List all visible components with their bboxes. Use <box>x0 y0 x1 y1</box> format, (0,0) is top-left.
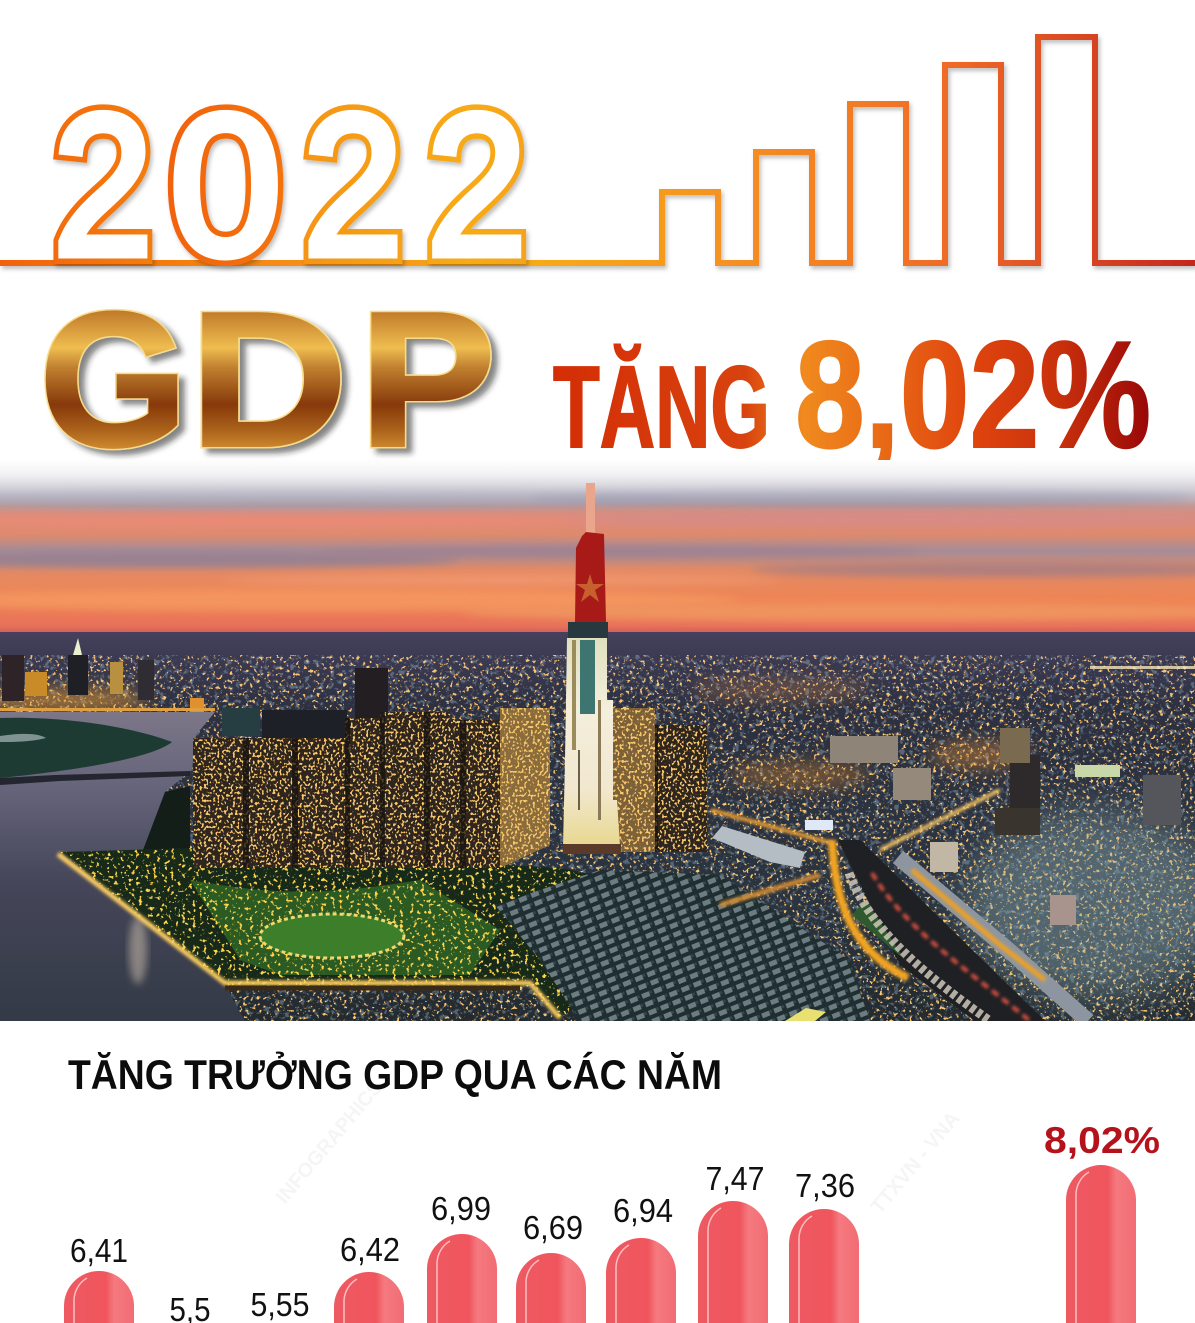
bar 6,69: 6,69 <box>523 1209 583 1246</box>
bar 7,47 <box>698 1160 768 1323</box>
green peninsula and bridge <box>0 718 190 785</box>
heading: 2022 outlined year: 2 <box>53 74 152 297</box>
heading: 2022 outlined year: 0 <box>170 74 281 297</box>
bar 6,99: 6,99 <box>431 1190 491 1227</box>
bar 6,99 <box>427 1190 497 1323</box>
photo: Ho Chi Minh City skyline at dusk <box>0 458 1195 1023</box>
bar 6,94 <box>606 1192 676 1323</box>
heading: GDP gold lettering <box>40 274 495 486</box>
heading: GDP gold lettering: G <box>40 274 187 486</box>
section title: TĂNG TRƯỞNG GDP QUA CÁC NĂM <box>68 1050 722 1098</box>
bar 6,41 <box>64 1232 134 1323</box>
buildings on the right side <box>712 728 1181 925</box>
heading: 2022 outlined year: 2 <box>427 74 526 297</box>
heading: TĂNG 8,02%: TĂNG <box>553 342 770 472</box>
heading: GDP gold lettering: D <box>190 274 347 486</box>
bar 7,36: 7,36 <box>795 1167 855 1204</box>
riverside park <box>54 848 588 1021</box>
heading: 2022 outlined year: 2 <box>53 74 152 297</box>
watermarks: INFOGRAPHICS <box>272 1077 387 1208</box>
Landmark 81 tower <box>563 483 621 854</box>
villa district <box>495 870 870 1021</box>
heading: 2022 outlined year <box>53 74 526 297</box>
bar 8,02 highlighted: 8,02% <box>1044 1120 1160 1161</box>
skyline line chart with rising bars <box>0 37 1195 263</box>
residential district lower right <box>940 810 1195 1020</box>
sky with sunset clouds <box>0 458 1195 635</box>
bar chart: GDP growth by year <box>64 1120 1160 1323</box>
heading: 2022 outlined year: 2 <box>427 74 526 297</box>
heading: 2022 outlined year: 0 <box>170 74 281 297</box>
distant towers on the left bank <box>2 638 388 740</box>
bar 6,42 <box>334 1231 404 1323</box>
heading: 2022 outlined year: 2 <box>303 74 402 297</box>
bar 8,02 highlighted <box>1044 1120 1160 1323</box>
heading: TĂNG 8,02% <box>553 310 1151 480</box>
bar 6,41: 6,41 <box>70 1232 128 1269</box>
highway with light trails <box>711 790 1088 1021</box>
heading: GDP gold lettering: P <box>360 274 495 486</box>
apartment towers beside the landmark <box>190 705 710 875</box>
heading: GDP gold lettering: G <box>40 274 187 486</box>
heading: GDP gold lettering: P <box>360 274 495 486</box>
heading: 2022 outlined year: 2 <box>303 74 402 297</box>
bar 7,47: 7,47 <box>706 1160 764 1197</box>
heading: GDP gold lettering: D <box>190 274 347 486</box>
bar 6,94: 6,94 <box>613 1192 673 1229</box>
bar 7,36 <box>789 1167 859 1323</box>
watermarks: TTXVN - VNA <box>867 1108 965 1218</box>
river <box>0 708 245 1021</box>
bar 6,42: 6,42 <box>340 1231 400 1268</box>
watermarks <box>272 1077 965 1218</box>
label 5,55: 5,55 <box>250 1286 310 1323</box>
bar 6,69 <box>516 1209 586 1323</box>
trees by the bank <box>143 786 190 850</box>
city backdrop with lights <box>0 632 1195 1022</box>
